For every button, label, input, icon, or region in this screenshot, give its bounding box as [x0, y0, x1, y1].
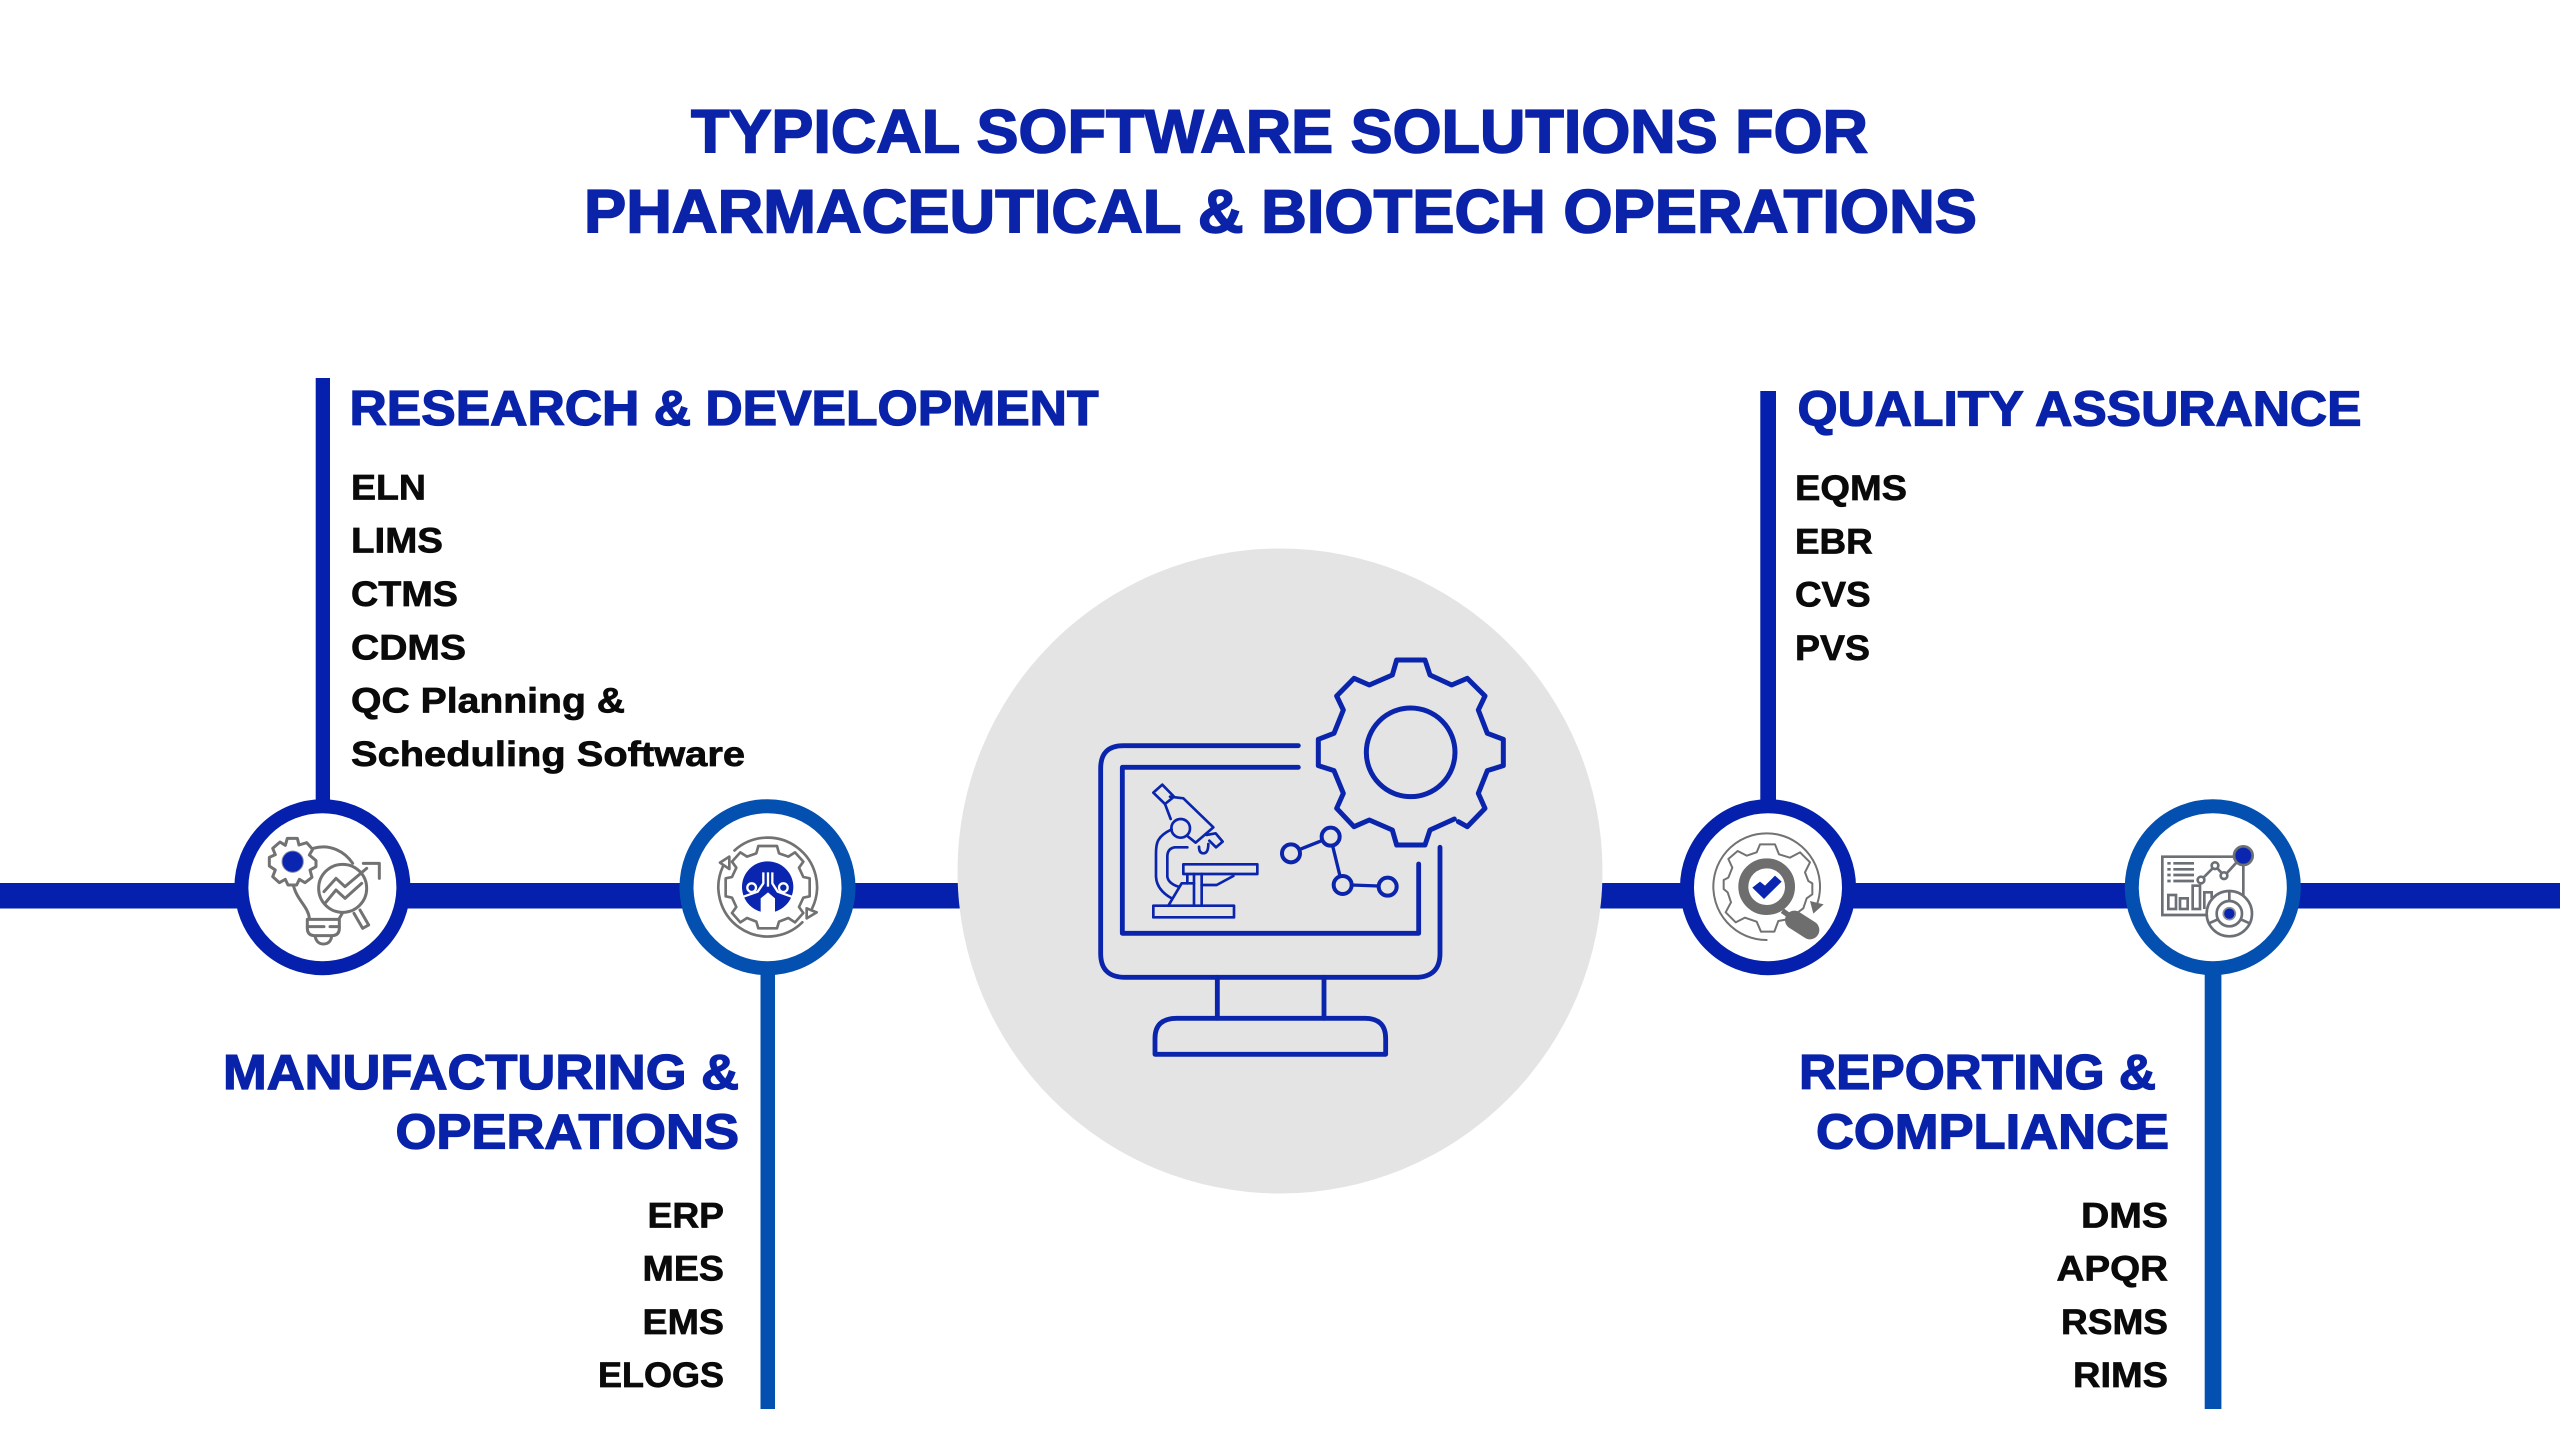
check mark	[1752, 876, 1782, 899]
connector: manufacturing and operations	[760, 950, 775, 1409]
list: reporting tools	[2056, 1196, 2168, 1395]
title: TYPICAL SOFTWARE SOLUTIONS FOR	[691, 98, 1868, 166]
horizontal timeline bar	[0, 883, 2560, 908]
circular arrow	[1713, 833, 1820, 940]
panel: research and development	[350, 382, 1099, 774]
list: research and development tools: Scheduling Software	[351, 735, 745, 774]
connector: reporting and compliance	[2205, 950, 2221, 1409]
list: research and development tools: QC Planning &	[351, 682, 625, 721]
heading: reporting and compliance	[1799, 1046, 2169, 1159]
list: manufacturing tools: MES	[642, 1250, 724, 1289]
list: reporting tools: DMS	[2081, 1196, 2168, 1235]
panel: quality assurance	[1795, 383, 2362, 668]
list: quality assurance tools: EQMS	[1795, 469, 1907, 508]
list: reporting tools: APQR	[2056, 1250, 2168, 1289]
heading: manufacturing and operations: OPERATIONS	[396, 1105, 739, 1159]
list: reporting tools: RSMS	[2061, 1303, 2168, 1342]
monitor	[1101, 746, 1440, 1054]
dial	[2207, 891, 2252, 936]
gear	[1318, 660, 1503, 845]
magnifier and trend	[319, 863, 379, 928]
heading: research and development: RESEARCH & DEVELOPMENT	[350, 382, 1099, 436]
gear outline	[726, 846, 810, 928]
text rows	[2167, 863, 2194, 881]
connector: research and development	[316, 378, 330, 818]
node 3: quality assurance icon	[1687, 806, 1849, 968]
title: PHARMACEUTICAL & BIOTECH OPERATIONS	[584, 178, 1977, 246]
list: quality assurance tools: PVS	[1795, 629, 1870, 668]
title	[584, 98, 1977, 246]
gear outline	[1724, 844, 1812, 932]
connector: quality assurance	[1760, 391, 1776, 821]
molecule	[1282, 828, 1397, 896]
heading: quality assurance: QUALITY ASSURANCE	[1798, 383, 2362, 437]
list: manufacturing tools: ERP	[648, 1196, 724, 1235]
magnifier	[1743, 863, 1790, 910]
list: manufacturing tools	[598, 1196, 724, 1395]
heading: reporting and compliance: REPORTING &	[1799, 1046, 2156, 1100]
list: research and development tools: LIMS	[351, 522, 443, 561]
circular arrows	[718, 838, 817, 937]
heading: manufacturing and operations	[223, 1046, 739, 1159]
central grey circle	[958, 548, 1602, 1194]
list: research and development tools	[351, 468, 745, 774]
node 1: research and development icon	[241, 806, 403, 968]
heading: manufacturing and operations: MANUFACTURING &	[223, 1046, 739, 1100]
bars	[2168, 895, 2176, 909]
list: quality assurance tools: EBR	[1795, 522, 1873, 561]
list: research and development tools: ELN	[351, 468, 426, 507]
microscope	[1153, 785, 1257, 917]
panel: manufacturing and operations	[223, 1046, 739, 1395]
list: research and development tools: CTMS	[351, 575, 458, 614]
line chart	[2203, 862, 2237, 878]
node 4: reporting and compliance icon	[2132, 806, 2294, 968]
blue core with people and flask	[742, 861, 793, 913]
list: quality assurance tools: CVS	[1795, 576, 1871, 614]
small gear	[269, 838, 316, 885]
list: manufacturing tools: ELOGS	[598, 1356, 724, 1395]
central icon: monitor with microscope, molecule and gear	[1101, 660, 1503, 1054]
report frame	[2162, 857, 2243, 915]
list: manufacturing tools: EMS	[642, 1303, 724, 1342]
target node	[2234, 846, 2253, 865]
list: research and development tools: CDMS	[351, 628, 466, 667]
heading: reporting and compliance: COMPLIANCE	[1816, 1105, 2169, 1159]
node 2: manufacturing and operations icon	[686, 806, 848, 968]
list: quality assurance tools	[1795, 469, 1907, 668]
panel: reporting and compliance	[1799, 1046, 2169, 1395]
lightbulb	[293, 847, 353, 944]
list: reporting tools: RIMS	[2073, 1356, 2168, 1395]
